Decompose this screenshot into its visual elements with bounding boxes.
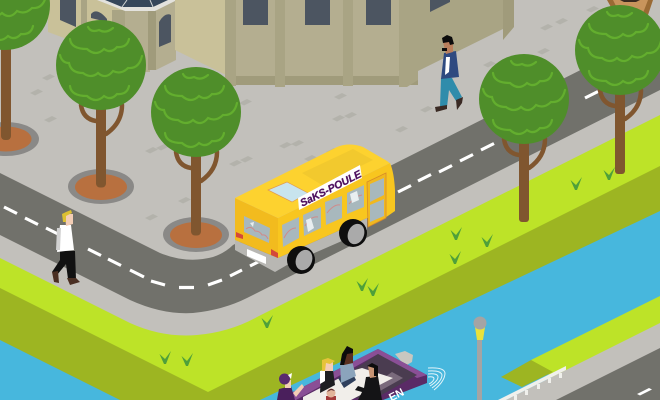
side windows	[282, 185, 364, 247]
tree 2	[56, 20, 146, 204]
boat passenger: man in black	[355, 363, 382, 400]
boat rim	[285, 349, 427, 400]
pavilion arched window	[159, 14, 171, 47]
pavement tiles	[30, 6, 599, 220]
boat hull	[285, 349, 427, 400]
far bank lime strip	[531, 296, 660, 378]
boat passenger: blond woman	[320, 358, 335, 393]
number plate	[247, 249, 266, 264]
canal water	[0, 211, 660, 400]
pavilion window	[60, 0, 76, 27]
tree 4	[479, 54, 569, 222]
bus wheels	[287, 246, 315, 274]
boat	[277, 346, 445, 400]
door	[367, 173, 386, 227]
far bank road	[556, 348, 660, 400]
lime grass embankment	[0, 115, 660, 400]
tree 5	[575, 5, 660, 174]
passengers	[250, 191, 359, 232]
skylight	[268, 182, 308, 202]
far bank pavement	[506, 323, 660, 400]
grass tufts	[160, 167, 615, 366]
far road dash	[637, 388, 652, 396]
road	[0, 30, 660, 313]
street lamp	[474, 316, 486, 400]
pedestrian: man in blue jacket	[435, 35, 463, 112]
boat passenger: woman in red	[326, 388, 336, 400]
bus	[235, 144, 395, 274]
rear window	[244, 216, 270, 243]
pillars	[225, 0, 418, 87]
olive embankment slope	[0, 166, 660, 400]
far bank olive patch	[501, 360, 553, 387]
pavilion glass roof	[97, 0, 177, 11]
hall windows	[243, 0, 391, 25]
bus rear face	[235, 198, 278, 258]
boat white deck	[303, 368, 393, 400]
boat motor	[395, 351, 413, 366]
bus skirt	[235, 218, 367, 272]
building: left pavilion	[48, 0, 177, 72]
tail lights	[236, 232, 278, 258]
boat interior	[310, 354, 417, 398]
bus: SaKS-POULE	[298, 168, 364, 209]
bus roof	[235, 144, 391, 218]
pedestrian: blond man in white shirt	[52, 210, 80, 285]
hall side wall	[418, 0, 503, 71]
bus seats	[246, 195, 362, 239]
bus side	[278, 163, 395, 258]
tree 3	[151, 67, 241, 252]
road centre dashes	[4, 92, 598, 288]
tree 1	[0, 0, 50, 156]
boat wake	[428, 368, 445, 390]
white railing	[498, 366, 566, 400]
building: main hall	[175, 0, 514, 87]
boat passenger: person in hat	[277, 373, 304, 400]
bus sign	[298, 165, 362, 210]
boat passenger: dark haired woman	[338, 346, 356, 388]
top right object behind tree	[607, 0, 653, 16]
